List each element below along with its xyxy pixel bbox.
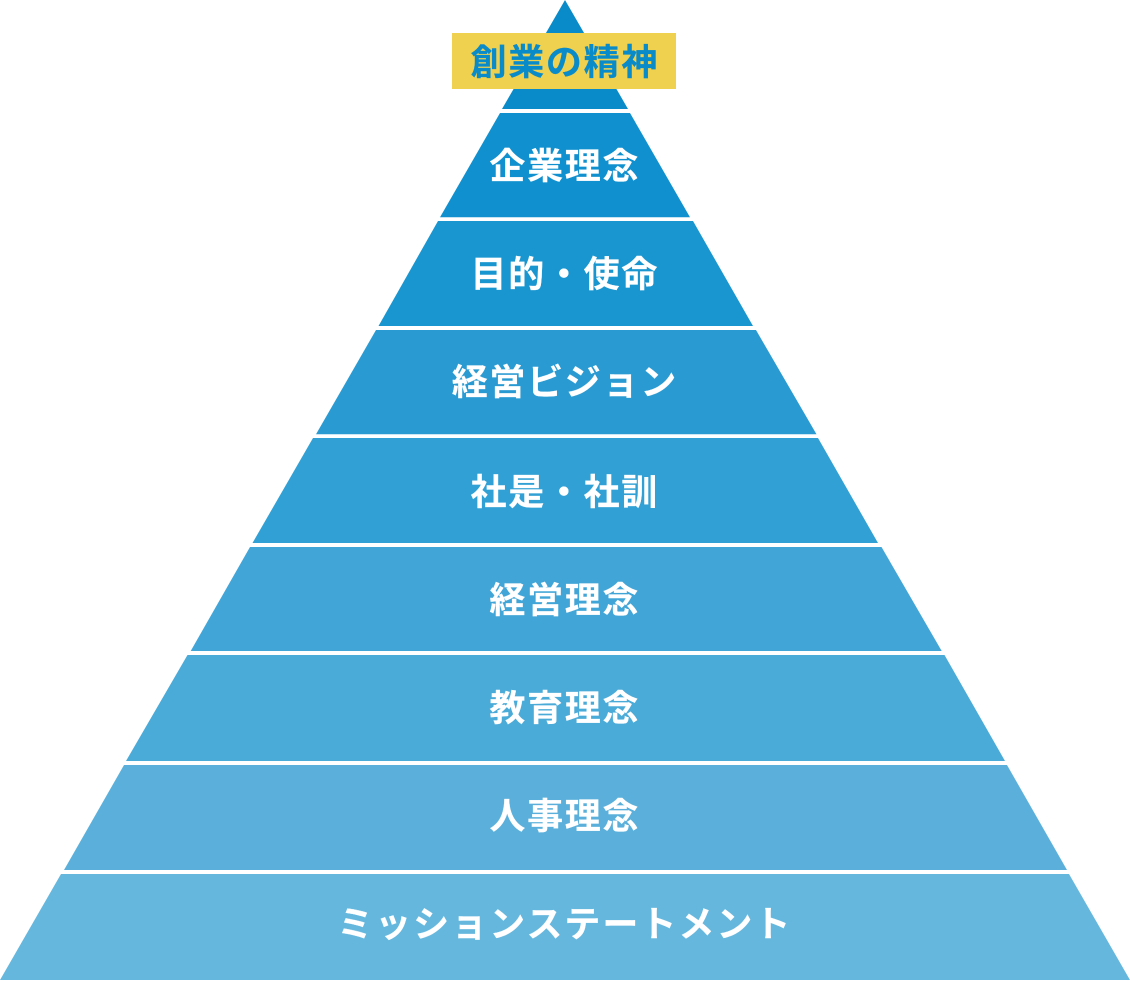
tier: ミッションステートメント: ミッションステートメント [337,904,792,944]
tier: ミッションステートメント [0,874,1130,980]
tier: 創業の精神 (apex) [452,0,676,109]
tier: 企業理念: 企業理念 [489,146,640,186]
tier: 経営理念: 経営理念 [489,580,640,620]
tier: 経営理念 [191,547,942,651]
tier: 人事理念 [64,765,1067,870]
tier: 社是・社訓: 社是・社訓 [471,472,659,512]
label plate: 創業の精神: 創業の精神 [471,42,659,82]
tier: 教育理念: 教育理念 [489,688,640,728]
tier: 経営ビジョン: 経営ビジョン [452,362,678,402]
tier: 経営ビジョン [316,330,816,434]
tier: 社是・社訓 [252,438,878,543]
tier: 企業理念 [440,113,690,217]
tier: 人事理念: 人事理念 [489,796,640,836]
label plate: 創業の精神 [452,33,676,89]
tier: 目的・使命: 目的・使命 [471,254,659,294]
tier: 目的・使命 [378,221,753,326]
tier: 教育理念 [126,655,1005,761]
